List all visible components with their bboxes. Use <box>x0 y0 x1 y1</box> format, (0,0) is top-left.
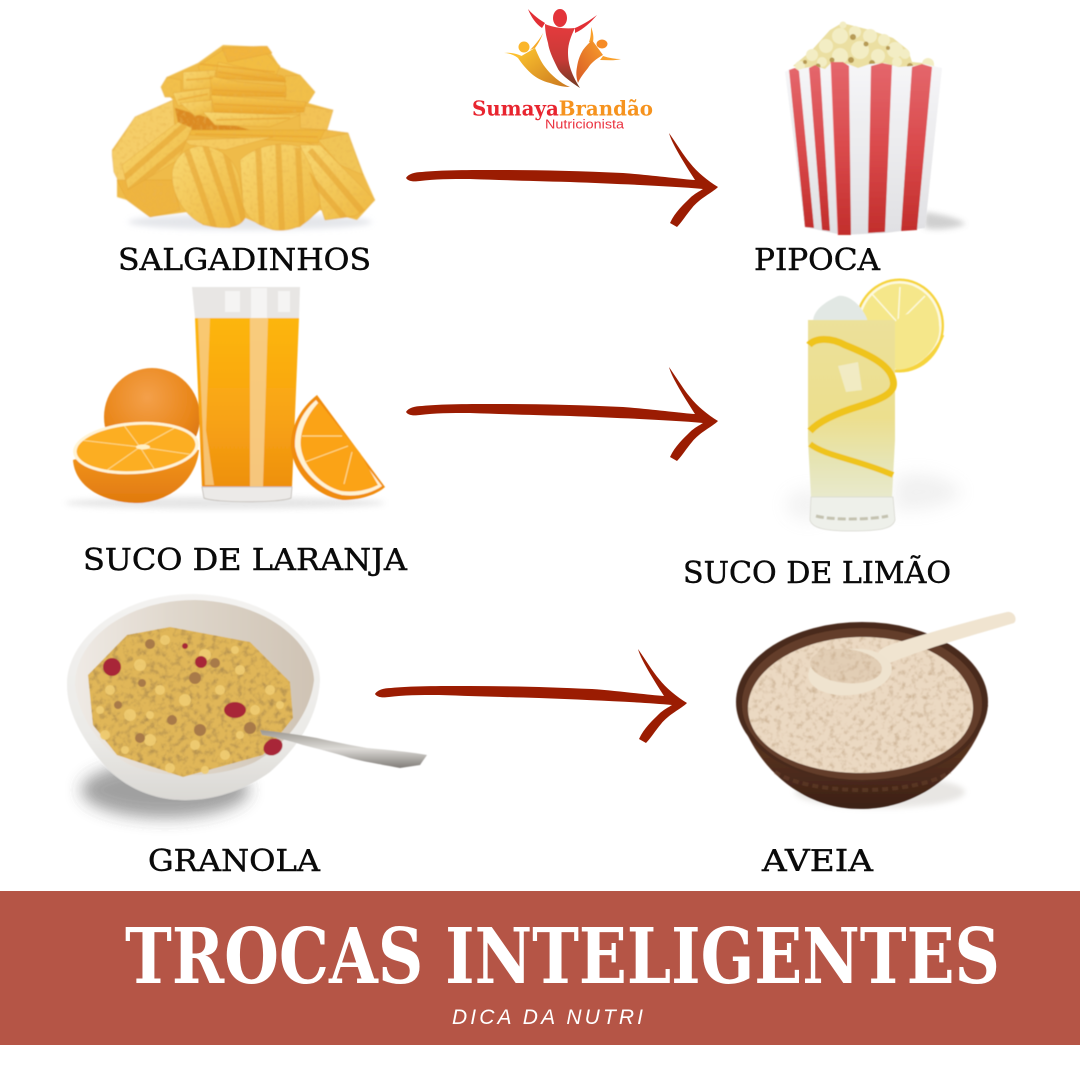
chips silhouette <box>112 45 375 230</box>
logo figures <box>504 9 621 88</box>
wooden spoon <box>806 612 1016 699</box>
bowl shadow <box>81 762 249 818</box>
wooden bowl <box>736 622 988 809</box>
label: pipoca: PIPOCA <box>754 243 880 278</box>
arrow: salgadinhos to pipoca <box>406 133 718 227</box>
glass with lemonade <box>808 320 895 531</box>
granola <box>88 627 293 777</box>
spoon handle <box>260 730 427 768</box>
food image: salgadinhos (chips) <box>112 45 380 232</box>
arrow: suco de laranja to suco de limão <box>406 367 718 461</box>
dried berries <box>103 643 286 759</box>
half orange <box>71 418 201 503</box>
arrow: granola to aveia <box>375 649 687 743</box>
food image: suco de laranja <box>65 287 385 509</box>
orange wedge <box>291 395 385 500</box>
food image: aveia bowl <box>736 612 1016 809</box>
label: salgadinhos: SALGADINHOS <box>118 243 371 278</box>
banner <box>0 891 1080 1045</box>
oats <box>748 637 973 773</box>
popcorn kernels <box>793 22 937 74</box>
label: suco de laranja: SUCO DE LARANJA <box>83 543 407 578</box>
food image: granola bowl <box>67 594 427 818</box>
bowl <box>67 594 320 800</box>
label: suco de limão: SUCO DE LIMÃO <box>683 555 951 591</box>
red stripes <box>789 62 932 235</box>
box shadow <box>924 212 966 229</box>
logo wordmark: SumayaBrandão <box>472 96 653 120</box>
lemon slice over glass <box>895 313 939 372</box>
lemon slice <box>855 278 944 372</box>
lemon peel spiral <box>809 339 893 431</box>
box body <box>785 62 942 235</box>
label: aveia: AVEIA <box>761 844 873 879</box>
logo: Sumaya Brandão Nutricionista <box>472 9 653 132</box>
food image: pipoca (popcorn box) <box>785 22 966 235</box>
whole orange <box>104 368 200 466</box>
label: granola: GRANOLA <box>148 844 320 879</box>
logo subtitle: Nutricionista <box>545 118 624 132</box>
crushed ice <box>813 296 868 322</box>
banner subtitle: DICA DA NUTRI <box>452 1006 643 1029</box>
glass of juice <box>192 287 300 502</box>
food image: suco de limão (lemonade) <box>786 278 962 531</box>
